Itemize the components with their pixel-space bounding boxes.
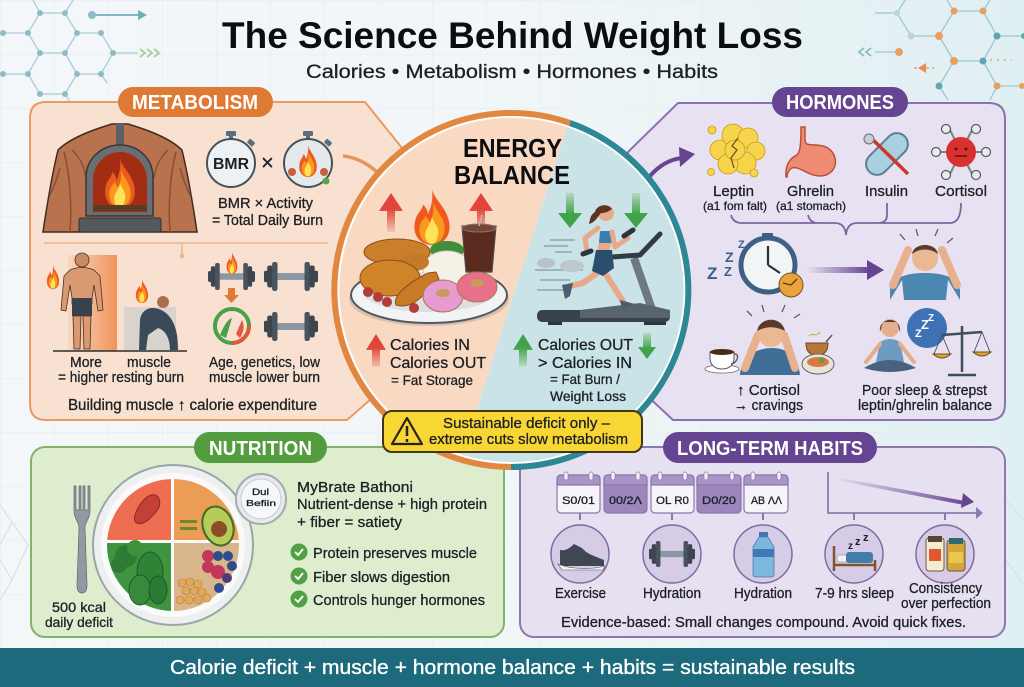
panel: long-term habits: [520, 432, 1005, 637]
icon: activity stopwatch: [284, 131, 332, 187]
icon: speed lines: [535, 240, 584, 290]
label: calorie deficit: [45, 599, 113, 630]
text: calories out: Weight Loss: [550, 388, 626, 404]
label: age and genetics: [209, 354, 320, 386]
hormone labels: Insulin: [865, 183, 908, 200]
habit labels: [555, 581, 991, 612]
caption: cortisol cravings: ↑ Cortisol: [737, 382, 800, 399]
icon: sleep bubble: Z: [928, 313, 934, 324]
arrow: metabolism to energy balance: [343, 156, 378, 173]
label: calorie deficit: daily deficit: [45, 614, 113, 630]
icon: ghrelin stomach: [786, 127, 835, 177]
icon: insulin: [862, 129, 912, 179]
icon: supplement jars: [916, 525, 974, 583]
callout: evidence based: Evidence-based: Small changes compound. Avoid quick fixes.: [561, 614, 966, 631]
icon: green down arrows: [558, 193, 648, 228]
hormone labels: (a1 stomach): [776, 199, 846, 213]
checklist: nutrition benefits: Protein preserves muscle: [313, 545, 477, 562]
hormone labels: Ghrelin: [787, 183, 834, 200]
callout: sustainable deficit warning: extreme cuts slow metabolism: [429, 431, 628, 448]
checklist: nutrition benefits: [290, 544, 485, 609]
formula text: [212, 195, 323, 229]
title: The Science Behind Weight Loss: [222, 15, 803, 56]
arrow: energy balance to hormones: [650, 147, 695, 176]
hormone labels: Cortisol: [935, 183, 987, 200]
badge: daily deficit dial: [236, 474, 286, 524]
icon: BMR stopwatch: BMR: [213, 156, 249, 173]
caption: cortisol cravings: → cravings: [734, 397, 803, 414]
icon: plate of high calorie food: [349, 215, 509, 326]
habit labels: Hydration: [734, 586, 792, 602]
icon: stressed person with cravings: [740, 305, 800, 375]
icon: sleep bubble: [907, 308, 947, 348]
badge: daily deficit dial: Befiin: [246, 498, 276, 508]
heading: nutrition: NUTRITION: [209, 438, 312, 460]
calendars: S0/01: [562, 495, 595, 507]
icon: bed and sleep: z: [848, 541, 853, 552]
icon: sleep clock: Z: [725, 249, 734, 265]
label: calorie deficit: 500 kcal: [52, 599, 106, 615]
callout: sustainable deficit warning: [383, 411, 642, 452]
text: nutrition summary: + fiber = satiety: [297, 514, 403, 531]
checklist: nutrition benefits: Fiber slows digestion: [313, 569, 450, 586]
icon: stressed person: [890, 229, 960, 300]
text: nutrition summary: MyBrate Bathoni: [297, 479, 413, 496]
calendars: AB ΛΛ: [751, 495, 783, 507]
icon: warning triangle: [392, 418, 422, 444]
text: calories out: > Calories IN: [538, 355, 632, 372]
formula text: = Total Daily Burn: [212, 212, 323, 229]
icon: leptin fat cells: [708, 124, 765, 177]
chart: energy balance circle: [331, 110, 692, 470]
calendars: OL R0: [656, 495, 689, 507]
checklist: nutrition benefits: Controls hunger hormones: [313, 592, 485, 609]
footer banner: Calorie deficit + muscle + hormone balance + habits = sustainable results: [170, 657, 855, 679]
icon: sleep clock: Z: [724, 264, 732, 279]
habit labels: 7-9 hrs sleep: [815, 586, 894, 602]
icon: BMR stopwatch: [207, 131, 255, 187]
icon: meditating woman: [864, 319, 916, 372]
text: calories out: [513, 333, 656, 404]
habit labels: Hydration: [643, 586, 701, 602]
habit labels: Consistency: [909, 581, 983, 597]
calendars: [557, 472, 788, 513]
arrow: sleep to stress: [807, 260, 884, 280]
caption: sleep and stress: Poor sleep & strepst: [862, 382, 988, 399]
panel: metabolism: [30, 87, 402, 420]
icon: fork: [74, 486, 90, 593]
caption: sleep and stress: [858, 382, 992, 414]
heading: energy balance: BALANCE: [454, 160, 570, 190]
icon: dumbbells and gauge: [208, 252, 318, 343]
icon: cortisol molecule: [932, 124, 990, 180]
multiply sign: ×: [261, 150, 274, 175]
bracket: [731, 203, 961, 235]
hormone labels: [703, 183, 987, 213]
icon: coffee cup: [705, 349, 739, 373]
icon: sleep clock: Z: [707, 264, 717, 283]
heading: long-term habits: [663, 432, 877, 463]
caption: cortisol cravings: [734, 382, 803, 414]
callout: building muscle: Building muscle ↑ calorie expenditure: [68, 397, 317, 414]
icon: torso with furnace: [43, 123, 197, 232]
heading: metabolism: METABOLISM: [132, 92, 258, 114]
icon: flame: [414, 189, 450, 245]
icon: bed and sleep: z: [863, 532, 869, 544]
habit labels: over perfection: [901, 596, 991, 612]
label: more muscle: = higher resting burn: [58, 369, 184, 386]
icon: sleep bubble: Z: [921, 317, 929, 332]
panel: nutrition: [31, 432, 504, 637]
icon: dumbbell: [643, 525, 701, 583]
icon: exercise shoe: [551, 525, 609, 583]
label: more muscle: More: [70, 354, 102, 371]
label: age and genetics: muscle lower burn: [209, 369, 320, 386]
subtitle: Calories • Metabolism • Hormones • Habits: [306, 62, 718, 83]
icon: stooped man: [139, 296, 178, 350]
text: nutrition summary: [297, 479, 487, 531]
icon: food bowl: [802, 332, 834, 374]
text: nutrition summary: Nutrient-dense + high protein: [297, 496, 487, 513]
text: calories out: Calories OUT: [538, 337, 633, 354]
heading: metabolism: [118, 87, 273, 117]
text: calories out: = Fat Burn /: [550, 371, 620, 387]
icon: red up arrows: [379, 193, 493, 232]
icon: water bottle: [734, 525, 792, 583]
badge: daily deficit dial: Dul: [252, 487, 269, 497]
icon: sleep bubble: Z: [915, 328, 922, 340]
heading: nutrition: [194, 432, 327, 463]
calendars: 00/2Λ: [609, 495, 643, 507]
text: calories in: Calories IN: [390, 337, 470, 354]
formula text: BMR × Activity: [218, 195, 313, 212]
label: more muscle: [58, 354, 184, 386]
heading: long-term habits: LONG-TERM HABITS: [677, 438, 863, 460]
text: calories in: [366, 334, 486, 388]
panel: hormones: [628, 87, 1005, 420]
callout: sustainable deficit warning: Sustainable deficit only –: [443, 415, 611, 432]
chart: muscle vs resting burn bars: [47, 253, 187, 351]
label: more muscle: muscle: [127, 354, 171, 371]
hormone labels: (a1 fom falt): [703, 199, 767, 213]
heading: energy balance: [454, 133, 570, 190]
icon: sleep clock: [707, 233, 803, 297]
text: calories in: = Fat Storage: [391, 372, 473, 388]
icon: treadmill: [537, 234, 670, 325]
heading: hormones: HORMONES: [786, 92, 894, 114]
footer banner: [0, 648, 1024, 687]
icon: bed and sleep: [825, 525, 883, 583]
text: calories in: Calories OUT: [390, 355, 486, 372]
hormone labels: Leptin: [713, 183, 754, 200]
icon: running woman: [562, 205, 635, 309]
icon: sleep clock: Z: [738, 239, 745, 251]
heading: energy balance: ENERGY: [463, 133, 562, 163]
icon: bed and sleep: z: [855, 536, 861, 548]
heading: hormones: [772, 87, 908, 117]
chart: downward trend: [828, 472, 983, 519]
label: age and genetics: Age, genetics, low: [209, 354, 320, 371]
caption: sleep and stress: leptin/ghrelin balance: [858, 397, 992, 414]
habit labels: Exercise: [555, 586, 606, 602]
icon: balance scale: [933, 326, 991, 375]
icon: balanced plate: [93, 465, 253, 625]
icon: muscular man: [61, 253, 103, 349]
calendars: D0/20: [702, 495, 736, 507]
